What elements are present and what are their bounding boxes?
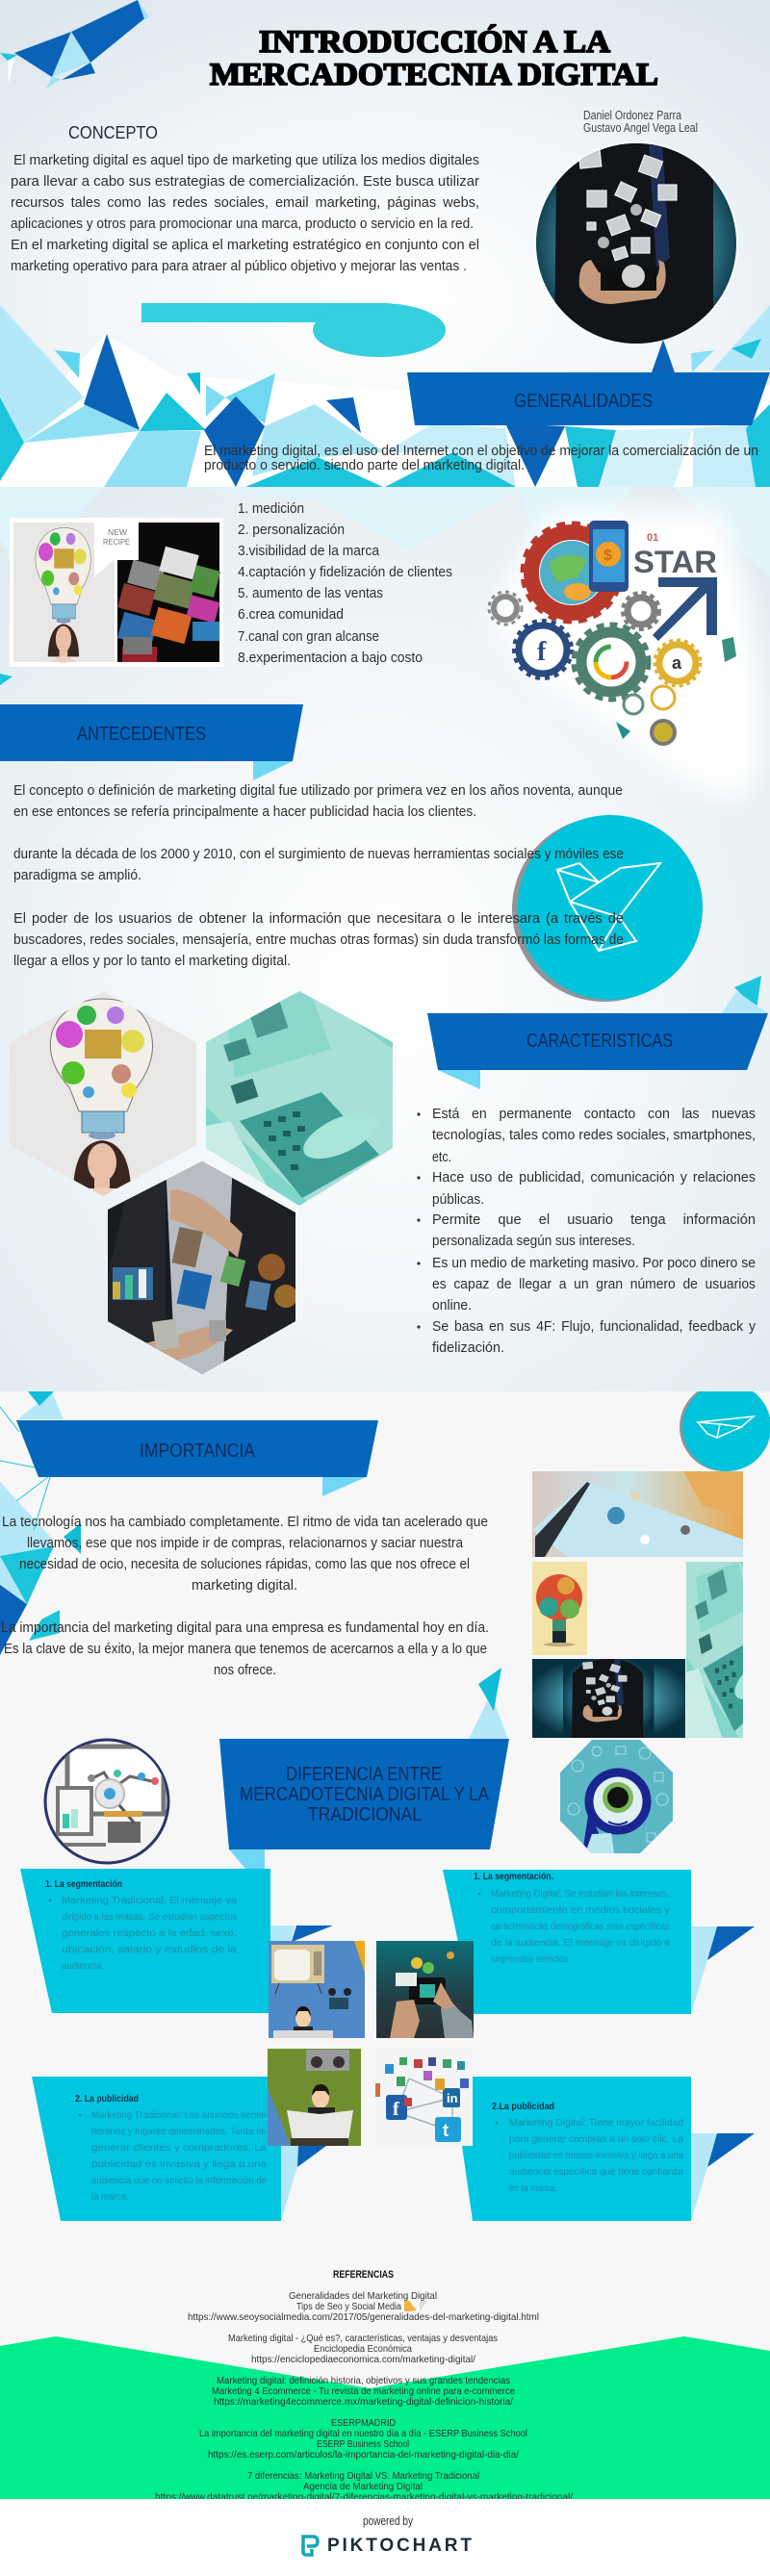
authors: Daniel Ordonez Parra — [583, 109, 681, 122]
image: gears with social network icons: f — [537, 637, 547, 667]
footer background — [0, 2499, 770, 2576]
hexagon photo: bulb and woman — [10, 991, 196, 1197]
panel: traditional segmentation — [20, 1852, 270, 2013]
bullet list: caracteristicas: fidelización. — [432, 1340, 504, 1356]
banner: diferencia: TRADICIONAL — [308, 1804, 422, 1825]
references — [155, 2269, 573, 2503]
references: Tips de Seo y Social Media — [296, 2301, 401, 2312]
panel: digital segmentation: segmentos selectos. — [491, 1953, 571, 1965]
title — [210, 23, 658, 92]
references: 7 diferencias: Marketing Digital VS. Marketing Tradicional — [247, 2470, 479, 2482]
panel: digital advertising: audiencia específica que tiene confianza — [509, 2166, 683, 2178]
low-poly triangles band — [0, 305, 770, 487]
list: benefits: 1. medición — [238, 501, 304, 517]
panel: traditional segmentation: 1. La segmentación — [45, 1878, 122, 1890]
photo: businessman with envelopes circle — [534, 141, 738, 345]
authors: Gustavo Angel Vega Leal — [583, 121, 698, 135]
banner: diferencia: MERCADOTECNIA DIGITAL Y LA — [240, 1784, 490, 1805]
bullet list: caracteristicas: personalizada según sus intereses. — [432, 1234, 635, 1249]
bullet list: caracteristicas: Permite que el usuario tenga información — [432, 1212, 756, 1228]
panel: digital advertising: 2.La publicidad — [492, 2101, 554, 2112]
circle: origami bird — [512, 815, 703, 1002]
references: Marketing digital - ¿Qué es?, características, ventajas y desventajas — [228, 2333, 498, 2344]
circle: origami plane — [680, 1383, 770, 1471]
references: Marketing 4 Ecommerce - Tu revista de marketing online para e-commerce — [212, 2385, 515, 2397]
bullet list: caracteristicas: es capaz de llegar a un gran número de usuarios — [432, 1277, 756, 1292]
bullet list: caracteristicas: etc. — [432, 1150, 451, 1165]
heading: concepto: CONCEPTO — [68, 122, 158, 142]
text block: concepto: recursos tales como las redes sociales, email marketing, páginas webs, — [11, 195, 479, 211]
text block: concepto: El marketing digital es aquel tipo de marketing que utiliza los medios digitales — [13, 153, 479, 168]
origami corner decoration — [0, 0, 149, 89]
image: gears with social network icons: STAR — [633, 545, 717, 579]
panel: digital advertising: Marketing Digital: Tiene mayor facilidad — [509, 2117, 683, 2129]
references: ESERPMADRID — [331, 2417, 396, 2429]
image: colorful icon bulb — [532, 1562, 587, 1655]
banner: diferencia — [219, 1739, 509, 1869]
references: REFERENCIAS — [333, 2269, 394, 2281]
panel: digital segmentation: 1. La segmentación. — [474, 1871, 553, 1882]
panel: traditional segmentation: dirigido a las masas. Se estudian aspectos — [62, 1911, 237, 1923]
bullet list: caracteristicas: tecnologías, tales como redes sociales, smartphones, — [432, 1128, 756, 1143]
title: MERCADOTECNIA DIGITAL — [210, 58, 658, 92]
panel: traditional advertising: audiencia que no solicitó la información de — [91, 2175, 267, 2186]
panel: digital segmentation: comportamiento en medios sociales y — [491, 1904, 671, 1916]
ribbon folds beside panels — [270, 1926, 755, 2221]
banner: generalidades: GENERALIDADES — [514, 391, 653, 412]
panel: digital segmentation: características demográficas más específicas — [491, 1921, 670, 1932]
list: benefits: 6.crea comunidad — [238, 607, 344, 623]
references: https://enciclopediaeconomica.com/marketing-digital/ — [251, 2354, 475, 2365]
text block: concepto: marketing operativo para para atraer al público objetivo y mejorar las ventas . — [11, 259, 467, 274]
banner: importancia: IMPORTANCIA — [140, 1441, 256, 1462]
image: gears with social network icons — [489, 521, 736, 744]
panel: digital advertising: en la marca. — [509, 2182, 557, 2194]
left low-poly decoration — [0, 1391, 81, 1655]
image: television and announcer — [269, 1941, 365, 2038]
panel: traditional advertising: publicidad es invasiva y llega a una — [91, 2158, 267, 2170]
text block: antecedentes: llegar a ellos y por lo tanto el marketing digital. — [13, 954, 291, 969]
bullet list: caracteristicas: Se basa en sus 4F: Flujo, funcionalidad, feedback y — [432, 1319, 757, 1335]
bullet list: caracteristicas: públicas. — [432, 1192, 484, 1208]
text block: antecedentes: paradigma se amplió. — [13, 868, 141, 883]
panel: traditional segmentation: Marketing Tradicional: El mensaje va — [62, 1895, 237, 1906]
image collage: bulb woman and media tiles: RECIPE — [103, 538, 130, 547]
references: ESERP Business School — [317, 2438, 409, 2450]
text block: concepto: para llevar a cabo sus estrategias de comercialización. Este busca utilizar — [11, 174, 479, 190]
text block: concepto: En el marketing digital se aplica el marketing estratégico en conjunto con el — [11, 238, 479, 253]
image: social network nodes: f — [393, 2099, 399, 2120]
banner: generalidades — [407, 372, 770, 425]
pale background triangles — [0, 487, 770, 1013]
list: benefits: 4.captación y fidelización de clientes — [238, 565, 452, 580]
image: gears with social network icons: 01 — [647, 532, 658, 544]
panel: traditional segmentation: ubicación, salario y estudios de la — [62, 1944, 237, 1955]
references: https://es.eserp.com/articulos/la-importancia-del-marketing-digital-dia-dia/ — [208, 2449, 519, 2461]
text block: importancia — [1, 1515, 489, 1678]
bullet list: caracteristicas: Está en permanente contacto con las nuevas — [432, 1107, 756, 1122]
image: hands holding tablet — [376, 1941, 474, 2038]
section background: intro — [0, 0, 770, 487]
text block: antecedentes: buscadores, redes sociales, mensajería, entre muchas otras formas) sin duda transformó las formas de — [13, 932, 624, 948]
panel: digital advertising: para generar compras a un solo clic. La — [509, 2133, 683, 2145]
text block: generalidades — [204, 444, 758, 473]
panel: digital advertising: publicidad es menos invasiva y llega a una — [509, 2150, 683, 2161]
panel: traditional advertising: generar clientes y compradores. La — [91, 2142, 267, 2154]
image: teal laptop crop — [686, 1562, 743, 1738]
banner: diferencia: DIFERENCIA ENTRE — [286, 1764, 442, 1785]
text block: importancia: Es la clave de su éxito, la mejor manera que tenemos de acercarnos a ella y a lo que — [4, 1642, 487, 1657]
list: benefits — [238, 501, 452, 666]
image: man reading newspaper — [268, 2049, 361, 2146]
text block: concepto — [11, 153, 479, 274]
footer: powered by: powered by — [363, 2514, 414, 2528]
hexagon photo: teal laptop — [206, 991, 393, 1206]
text block: antecedentes — [13, 783, 624, 969]
decorative teal speech shape — [141, 303, 446, 357]
text block: antecedentes: en ese entonces se refería principalmente a hacer publicidad hacia los clientes. — [13, 804, 476, 820]
text block: importancia: La importancia del marketing digital para una empresa es fundamental hoy en día. — [1, 1620, 489, 1636]
panel: traditional segmentation: audiencia. — [62, 1960, 104, 1972]
bullet list: caracteristicas — [417, 1107, 757, 1356]
text block: generalidades: producto o servicio. siendo parte del marketing digital. — [204, 458, 525, 473]
banner: caracteristicas — [427, 1013, 768, 1089]
panel: digital segmentation: de la audiencia. El mensaje va dirigido a — [491, 1937, 670, 1949]
image: businessman with envelopes — [532, 1659, 685, 1738]
image collage: bulb woman and media tiles — [10, 518, 223, 667]
text block: generalidades: El marketing digital, es el uso del Internet con el objetivo de mejorar la comercialización de un — [204, 444, 758, 459]
authors — [583, 109, 698, 135]
text block: antecedentes: durante la década de los 2000 y 2010, con el surgimiento de nuevas herramientas sociales y móviles ese — [13, 847, 624, 862]
panel: traditional advertising: Marketing Tradicional: Los anuncios tienen — [91, 2109, 267, 2121]
panel: traditional advertising: 2. La publicidad — [75, 2093, 139, 2104]
green wave footer shape — [0, 2336, 770, 2499]
white brush splash — [491, 510, 760, 803]
text block: importancia: marketing digital. — [192, 1578, 297, 1594]
text block: antecedentes: El concepto o definición de marketing digital fue utilizado por primera vez en los años noventa, aunque — [13, 783, 623, 799]
panel: traditional advertising: la marca. — [91, 2191, 129, 2203]
references: Enciclopedia Económica — [314, 2343, 412, 2355]
panel: traditional segmentation: generales respecto a la edad, sexo, — [62, 1927, 237, 1939]
banner: importancia — [16, 1420, 378, 1496]
references: Agencia de Marketing Digital — [303, 2481, 423, 2492]
bullet list: caracteristicas: Hace uso de publicidad, comunicación y relaciones — [432, 1170, 756, 1186]
section background: generalities to characteristics — [0, 487, 770, 1391]
image: social network nodes: t — [443, 2121, 449, 2140]
references: https://marketing4ecommerce.mx/marketing-digital-definicion-historia/ — [214, 2396, 513, 2408]
list: benefits: 3.visibilidad de la marca — [238, 544, 380, 559]
bullet list: caracteristicas: Es un medio de marketing masivo. Por poco dinero se — [432, 1256, 756, 1271]
image: social network nodes — [375, 2049, 473, 2146]
text block: importancia: La tecnología nos ha cambiado completamente. El ritmo de vida tan acelerado que — [2, 1515, 488, 1530]
list: benefits: 5. aumento de las ventas — [238, 586, 383, 601]
panel: traditional advertising: horarios y lugares determinados. Tarda en — [91, 2126, 267, 2137]
text block: importancia: llevamos, ese que nos impide ir de compras, relacionarnos y saciar nuestra — [27, 1536, 464, 1551]
banner: antecedentes: ANTECEDENTES — [77, 724, 206, 745]
section background: importance to references — [0, 1391, 770, 2499]
panel: digital segmentation — [443, 1870, 691, 2014]
icon: magnifier eye octagon — [560, 1740, 673, 1853]
image: gears with social network icons: $ — [603, 548, 612, 564]
panel: traditional advertising — [32, 2077, 281, 2221]
banner: caracteristicas: CARACTERISTICAS — [526, 1031, 673, 1052]
references: Generalidades del Marketing Digital — [289, 2290, 437, 2302]
banner: antecedentes — [0, 704, 303, 780]
panel: digital advertising — [452, 2077, 691, 2221]
references: https://www.datatrust.pe/marketing-digital/7-diferencias-marketing-digital-vs-marketing-tradicional/ — [155, 2491, 573, 2503]
list: benefits: 8.experimentacion a bajo costo — [238, 650, 423, 666]
bullet list: caracteristicas: online. — [432, 1298, 472, 1314]
references: La importancia del marketing digital en nuestro día a día - ESERP Business School — [199, 2428, 527, 2439]
image: phone with icons — [532, 1471, 743, 1557]
text block: concepto: aplicaciones y otros para promocionar una marca, producto o servicio en la red. — [11, 217, 474, 232]
image collage: bulb woman and media tiles: NEW — [108, 528, 127, 537]
text block: importancia: necesidad de ocio, necesita de soluciones rápidas, como las que nos ofrece el — [19, 1557, 470, 1572]
icon: analytics monitors circle — [45, 1740, 168, 1863]
list: benefits: 7.canal con gran alcanse — [238, 629, 379, 645]
references: https://www.seoysocialmedia.com/2017/05/generalidades-del-marketing-digital.html — [188, 2311, 539, 2323]
text block: antecedentes: El poder de los usuarios de obtener la información que necesitara o le interesara (a través de — [13, 911, 624, 927]
panel: digital segmentation: Marketing Digital: Se estudian los intereses, — [491, 1888, 670, 1900]
list: benefits: 2. personalización — [238, 523, 345, 538]
text block: importancia: nos ofrece. — [214, 1663, 276, 1678]
title: INTRODUCCIÓN A LA — [259, 23, 610, 60]
logo: piktochart: PIKTOCHART — [327, 2536, 472, 2556]
hexagon photo: business hands with media — [108, 1161, 297, 1374]
image: gears with social network icons: a — [672, 653, 682, 673]
image: social network nodes: in — [447, 2091, 458, 2105]
small triangles decoration — [469, 1668, 508, 1739]
references: Marketing digital: definición historia, objetivos y sus grandes tendencias — [217, 2375, 510, 2386]
